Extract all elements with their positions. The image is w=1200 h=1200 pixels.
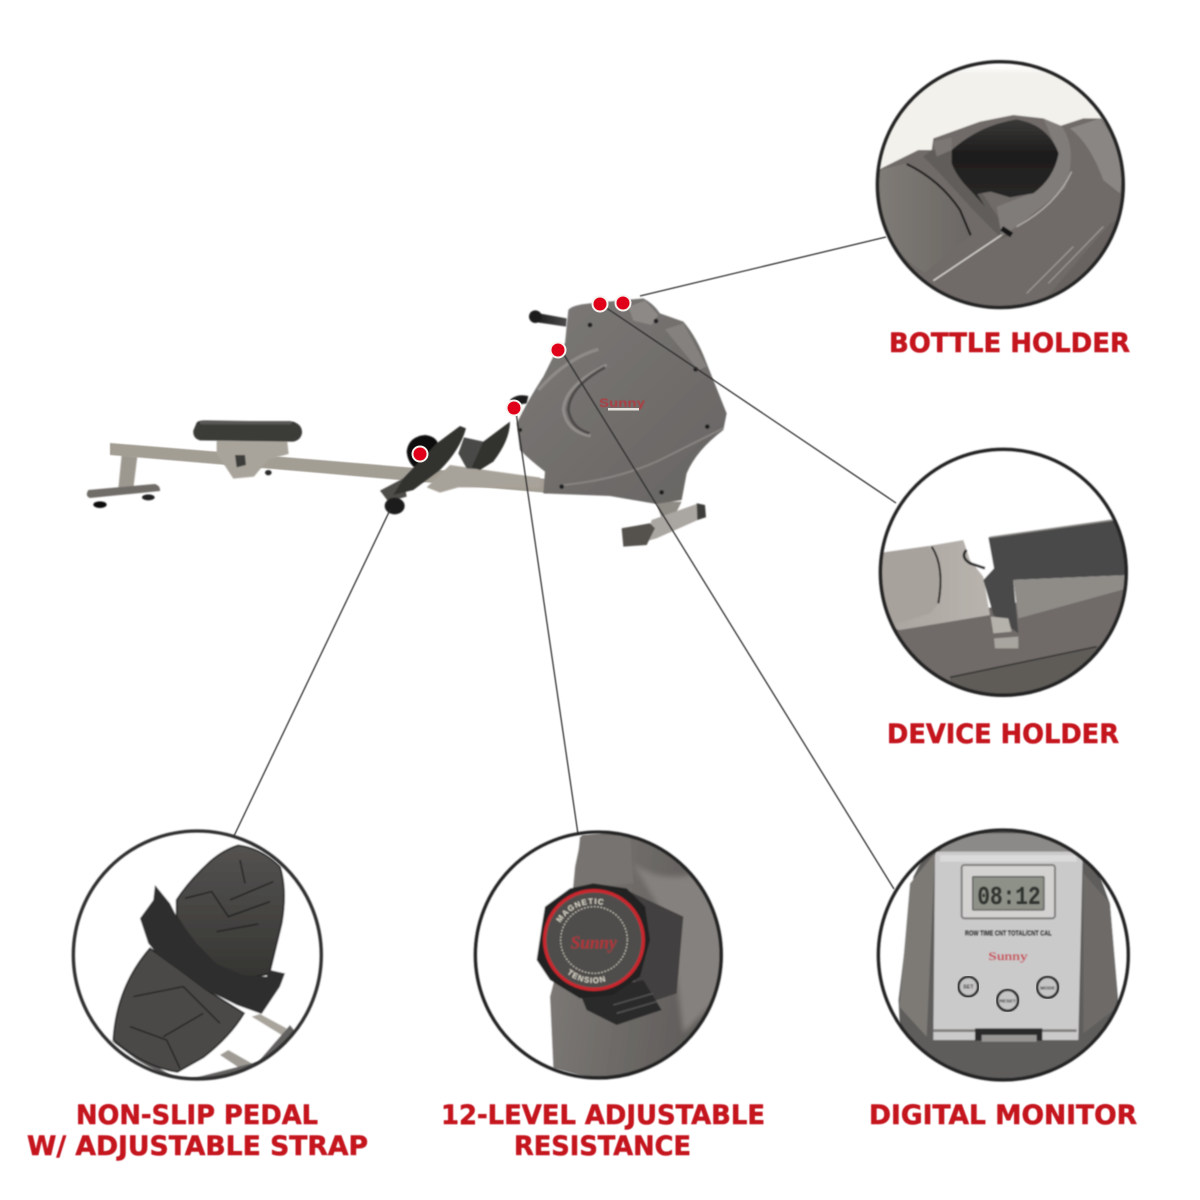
brand logo on housing: Sunny bbox=[599, 396, 645, 410]
monitor brand: Sunny bbox=[988, 949, 1028, 963]
button: reset bbox=[997, 990, 1018, 1011]
knob text bottom: TENSION bbox=[568, 968, 606, 984]
leader lines bbox=[233, 237, 896, 889]
dotted scale bbox=[561, 907, 627, 973]
leader: bottle holder bbox=[640, 237, 886, 296]
panel: pedal bbox=[70, 820, 337, 1087]
ring bbox=[880, 449, 1126, 695]
left pedal bbox=[393, 426, 466, 495]
photo: pedal bbox=[110, 837, 294, 1078]
marker: pedal bbox=[412, 446, 428, 462]
label: device holder: DEVICE HOLDER bbox=[887, 719, 1119, 750]
button: set bbox=[959, 977, 978, 996]
upper sole bbox=[177, 845, 284, 980]
linkage bbox=[458, 437, 483, 469]
button: reset: RESET bbox=[999, 998, 1016, 1004]
handle bbox=[529, 310, 567, 327]
rowing machine bbox=[87, 298, 727, 547]
red hotspot markers bbox=[412, 296, 630, 462]
flywheel housing bbox=[517, 298, 727, 504]
strap blob bbox=[407, 435, 438, 472]
photo: device holder bbox=[881, 518, 1126, 695]
label: non-slip pedal: W/ ADJUSTABLE STRAP bbox=[27, 1131, 368, 1162]
marker: monitor bbox=[550, 342, 566, 358]
pedals bbox=[380, 395, 540, 514]
knob text top: MAGNETIC bbox=[555, 897, 604, 924]
pedal bracket bbox=[380, 478, 407, 502]
ring bbox=[475, 832, 721, 1078]
label: adjustable resistance: 12-LEVEL ADJUSTABLE bbox=[441, 1100, 765, 1131]
seat bbox=[193, 420, 302, 479]
rail bracket bbox=[427, 465, 540, 493]
leader: resistance bbox=[516, 412, 578, 834]
housing detail bbox=[518, 301, 723, 495]
panel: resistance knob bbox=[472, 829, 724, 1081]
label: non-slip pedal: NON-SLIP PEDAL bbox=[76, 1100, 318, 1131]
panel: device holder bbox=[878, 446, 1130, 698]
label: adjustable resistance bbox=[441, 1100, 765, 1162]
button: mode bbox=[1037, 977, 1058, 998]
strap bbox=[140, 885, 285, 1014]
photo: resistance knob bbox=[536, 833, 721, 1078]
button: set: SET bbox=[963, 985, 974, 991]
panel: digital monitor bbox=[870, 820, 1137, 1087]
rear stabilizer and seat bbox=[87, 420, 302, 508]
label: bottle holder: BOTTLE HOLDER bbox=[889, 328, 1130, 359]
marker: resistance bbox=[506, 400, 522, 416]
leader: device holder bbox=[605, 307, 896, 503]
leader: digital monitor bbox=[558, 345, 894, 889]
label: non-slip pedal bbox=[27, 1100, 368, 1162]
marker: bottle bbox=[616, 296, 630, 310]
right pedal bbox=[472, 422, 510, 470]
lcd readout: 08:12 bbox=[977, 882, 1041, 912]
button: mode: MODE bbox=[1040, 985, 1056, 991]
lower sole bbox=[113, 948, 244, 1072]
tread chevrons bbox=[130, 860, 273, 1068]
knob face bbox=[545, 891, 643, 989]
front stabilizer bbox=[622, 502, 706, 547]
knob brand: Sunny bbox=[571, 932, 618, 952]
tension knob base bbox=[510, 395, 528, 405]
ring bbox=[73, 831, 321, 1079]
ring bbox=[877, 62, 1123, 308]
ring bbox=[878, 830, 1128, 1080]
photo: digital monitor bbox=[898, 830, 1119, 1080]
machine rail bbox=[110, 443, 548, 493]
front assembly bbox=[517, 298, 727, 547]
pedal knob bbox=[385, 498, 405, 514]
label: adjustable resistance: RESISTANCE bbox=[514, 1131, 691, 1162]
label: digital monitor: DIGITAL MONITOR bbox=[869, 1100, 1137, 1131]
knob body bbox=[537, 883, 650, 998]
leader: pedal bbox=[233, 510, 390, 838]
monitor caption: ROW TIME CNT TOTAL/CNT CAL bbox=[965, 929, 1052, 938]
panel: bottle holder bbox=[874, 58, 1126, 310]
marker: device bbox=[592, 296, 608, 312]
photo: bottle holder bbox=[878, 70, 1123, 307]
rear stabilizer bbox=[87, 455, 160, 508]
